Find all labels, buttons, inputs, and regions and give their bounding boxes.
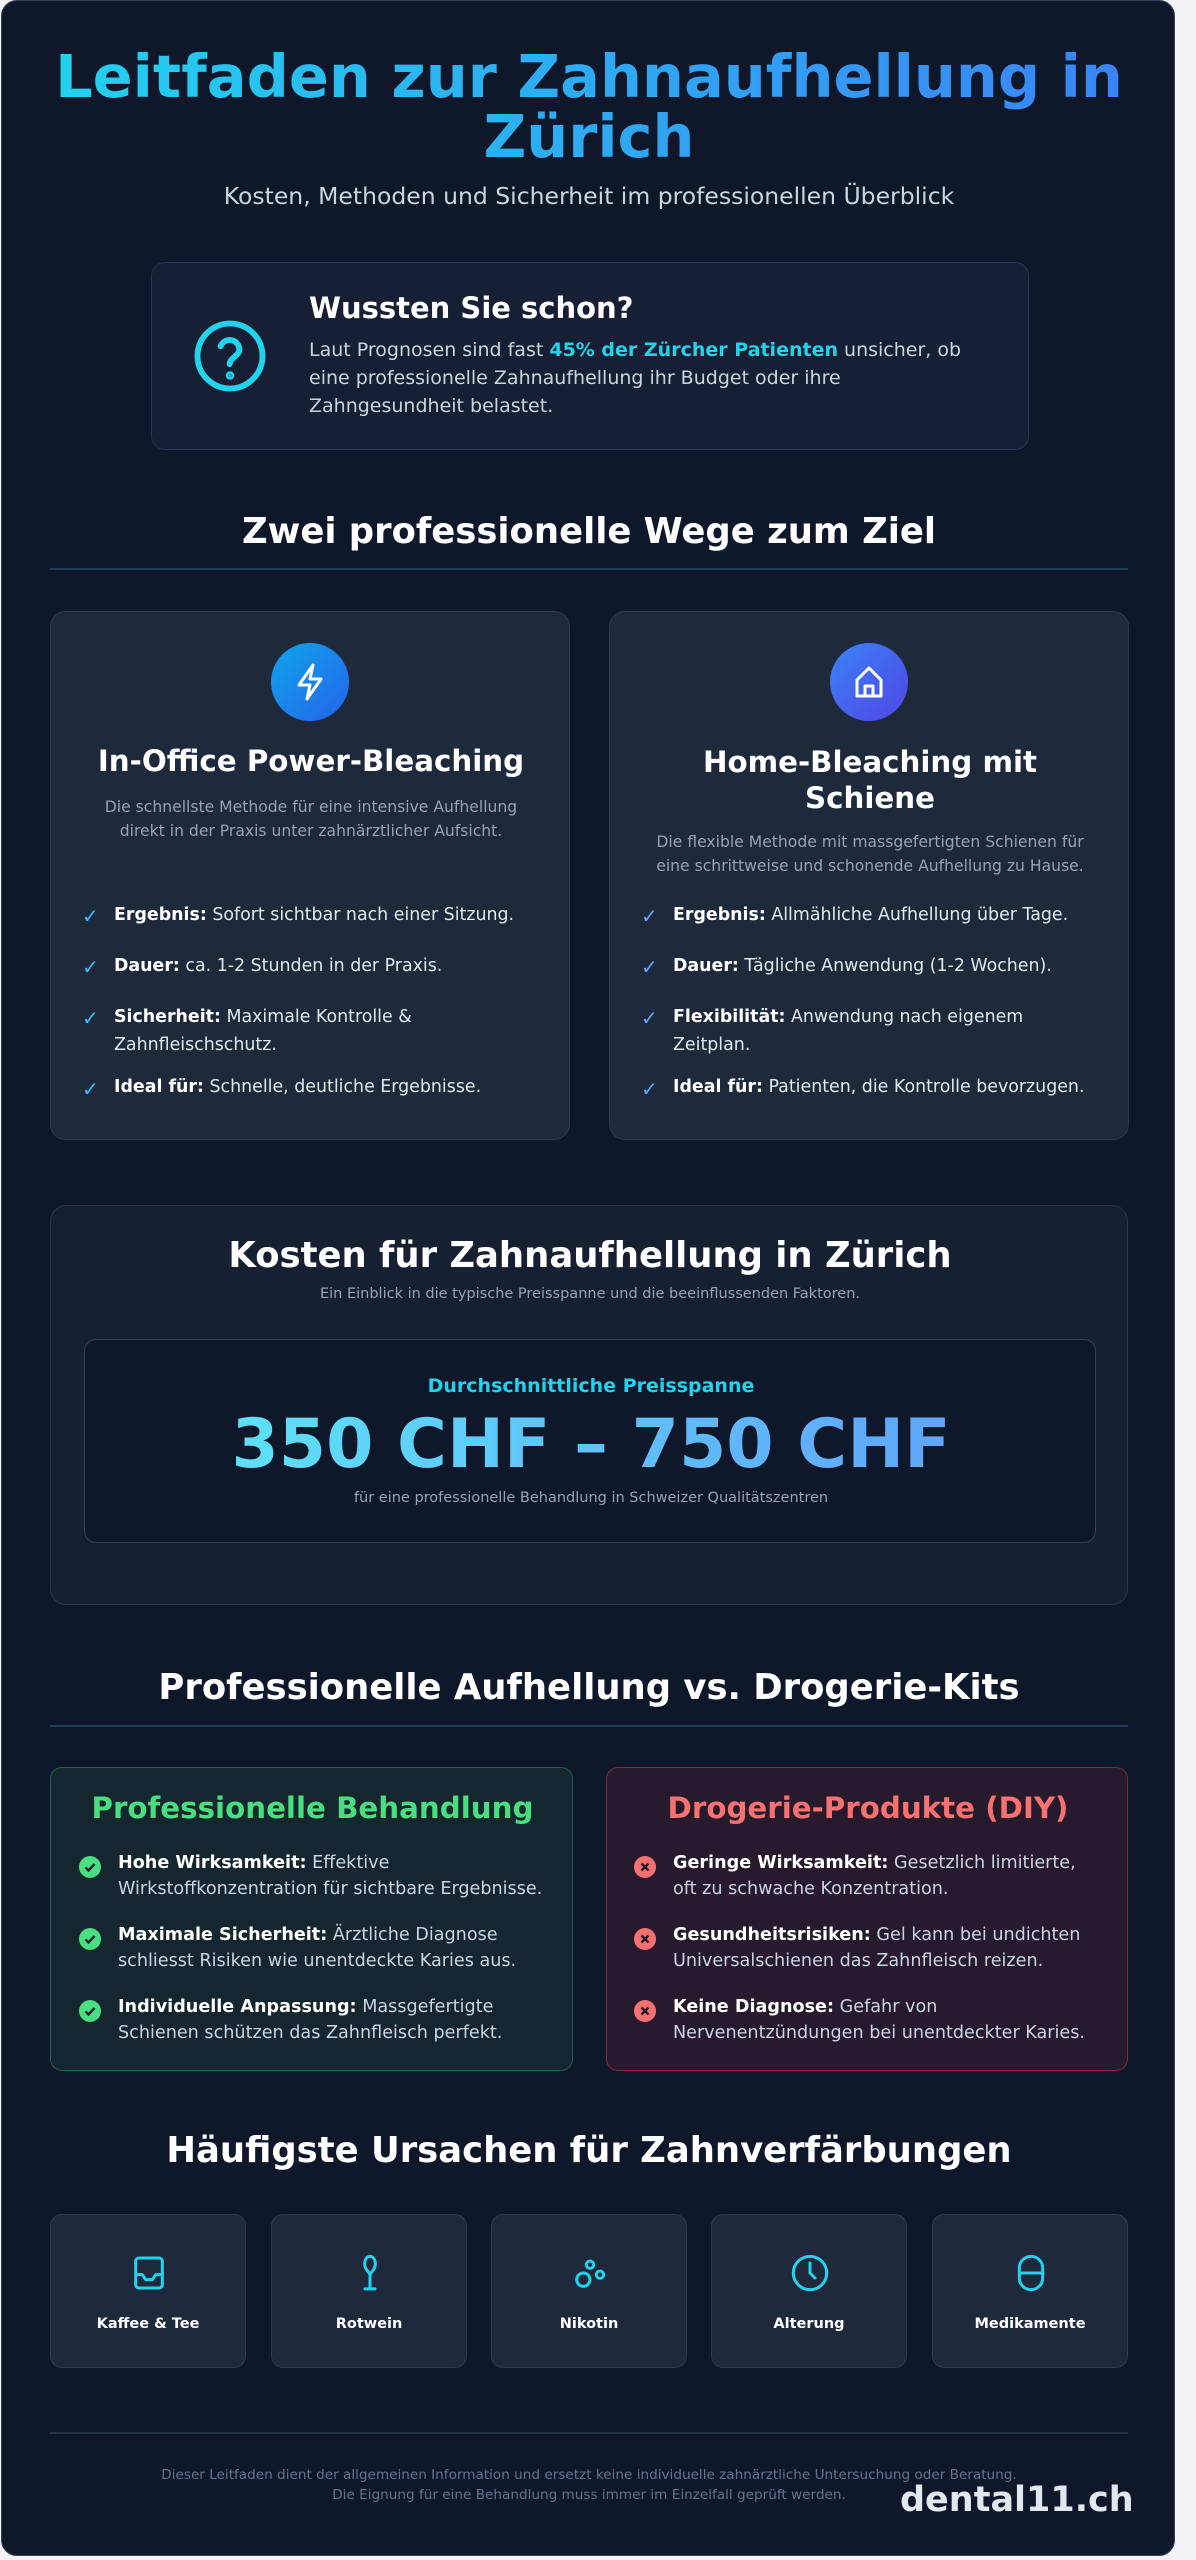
- card description: Die schnellste Methode für eine intensive Aufhellung direkt in der Praxis unter zahnärztlicher Aufsicht.: [105, 798, 517, 840]
- pro title: Professionelle Behandlung: [92, 1791, 533, 1825]
- list: Ideal für: Schnelle, deutliche Ergebnisse.: [114, 1077, 481, 1097]
- list: Sicherheit: Maximale Kontrolle & Zahnfleischschutz.: [114, 1007, 412, 1055]
- heading: two ways: Zwei professionelle Wege zum Ziel: [242, 511, 936, 552]
- callout text: Laut Prognosen sind fast 45% der Zürcher Patienten unsicher, ob eine professionelle Zahnaufhellung ihr Budget oder ihre Zahngesundheit belastet.: [309, 339, 961, 417]
- list: Flexibilität: Anwendung nach eigenem Zeitplan.: [673, 1007, 1023, 1055]
- icon: question circle: [194, 320, 266, 392]
- pro list: Individuelle Anpassung: Massgefertigte Schienen schützen das Zahnfleisch perfekt.: [118, 1997, 502, 2043]
- price note: für eine professionelle Behandlung in Schweizer Qualitätszentren: [354, 1490, 828, 1506]
- list: Ideal für: Patienten, die Kontrolle bevorzugen.: [673, 1077, 1084, 1097]
- list: Ergebnis: Allmähliche Aufhellung über Tage.: [673, 905, 1068, 925]
- list: ✓: [82, 1006, 99, 1030]
- callout heading: Wussten Sie schon?: [309, 291, 634, 325]
- cost heading: Kosten für Zahnaufhellung in Zürich: [228, 1235, 952, 1276]
- tile: red wine: [271, 2214, 467, 2368]
- list: Dauer: Tägliche Anwendung (1-2 Wochen).: [673, 956, 1052, 976]
- pro list: Hohe Wirksamkeit: Effektive Wirkstoffkonzentration für sichtbare Ergebnisse.: [118, 1853, 542, 1899]
- card description: Die flexible Methode mit massgefertigten Schienen für eine schrittweise und schonende Aufhellung zu Hause.: [656, 833, 1084, 875]
- list: ✓: [641, 955, 658, 979]
- icon: house: [830, 643, 908, 721]
- diy list: [634, 1853, 1085, 2043]
- tile: aging: [711, 2214, 907, 2368]
- footer disclaimer: Die Eignung für eine Behandlung muss immer im Einzelfall geprüft werden.: [332, 2487, 846, 2503]
- panel: costs: [50, 1205, 1128, 1605]
- diy list: Keine Diagnose: Gefahr von Nervenentzündungen bei unentdeckter Karies.: [673, 1997, 1085, 2043]
- price label: Durchschnittliche Preisspanne: [428, 1375, 754, 1397]
- diy list: Gesundheitsrisiken: Gel kann bei undichten Universalschienen das Zahnfleisch reizen.: [673, 1925, 1080, 1971]
- list: ✓: [82, 955, 99, 979]
- list: Ergebnis: Sofort sichtbar nach einer Sitzung.: [114, 905, 514, 925]
- list: ✓: [641, 904, 658, 928]
- list: ✓: [82, 904, 99, 928]
- diy title: Drogerie-Produkte (DIY): [668, 1791, 1068, 1825]
- heading: causes: Häufigste Ursachen für Zahnverfärbungen: [166, 2130, 1012, 2171]
- tile: medication: Medikamente: [974, 2316, 1086, 2332]
- panel: in-office: [50, 611, 570, 1140]
- title: Leitfaden zur Zahnaufhellung in Zürich: [55, 42, 1123, 171]
- tile: nicotine: Nikotin: [560, 2316, 618, 2332]
- icon: lightning: [271, 643, 349, 721]
- callout: did you know: [151, 262, 1029, 450]
- list: [641, 904, 1084, 1101]
- tile: nicotine: [491, 2214, 687, 2368]
- footer disclaimer: Dieser Leitfaden dient der allgemeinen Information und ersetzt keine individuelle zahnärztliche Untersuchung oder Beratung.: [161, 2467, 1017, 2483]
- brand: dental11.ch: [900, 2480, 1134, 2520]
- pro list: Maximale Sicherheit: Ärztliche Diagnose schliesst Risiken wie unentdeckte Karies aus.: [118, 1925, 516, 1971]
- list: ✓: [641, 1077, 658, 1101]
- panel: diy: [606, 1767, 1128, 2071]
- card title: Home-Bleaching mit Schiene: [703, 745, 1037, 815]
- panel: home bleaching: [609, 611, 1129, 1140]
- panel: professional: [50, 1767, 573, 2071]
- tile: aging: Alterung: [773, 2316, 845, 2332]
- diy list: Geringe Wirksamkeit: Gesetzlich limitierte, oft zu schwache Konzentration.: [673, 1853, 1076, 1899]
- price value: 350 CHF – 750 CHF: [231, 1405, 951, 1484]
- list: ✓: [82, 1077, 99, 1101]
- card title: In-Office Power-Bleaching: [98, 744, 524, 778]
- tile: red wine: Rotwein: [336, 2316, 402, 2332]
- price box: [84, 1339, 1096, 1543]
- footer disclaimer: [161, 2467, 1017, 2503]
- tile: coffee: [50, 2214, 246, 2368]
- tile: coffee: Kaffee & Tee: [97, 2316, 199, 2332]
- heading: pro vs diy: Professionelle Aufhellung vs. Drogerie-Kits: [158, 1667, 1020, 1708]
- tile: medication: [932, 2214, 1128, 2368]
- list: ✓: [641, 1006, 658, 1030]
- subtitle: Kosten, Methoden und Sicherheit im professionellen Überblick: [224, 182, 954, 210]
- cost subtitle: Ein Einblick in die typische Preisspanne und die beeinflussenden Faktoren.: [320, 1286, 860, 1302]
- list: Dauer: ca. 1-2 Stunden in der Praxis.: [114, 956, 442, 976]
- list: [82, 904, 514, 1101]
- pro list: [79, 1853, 542, 2043]
